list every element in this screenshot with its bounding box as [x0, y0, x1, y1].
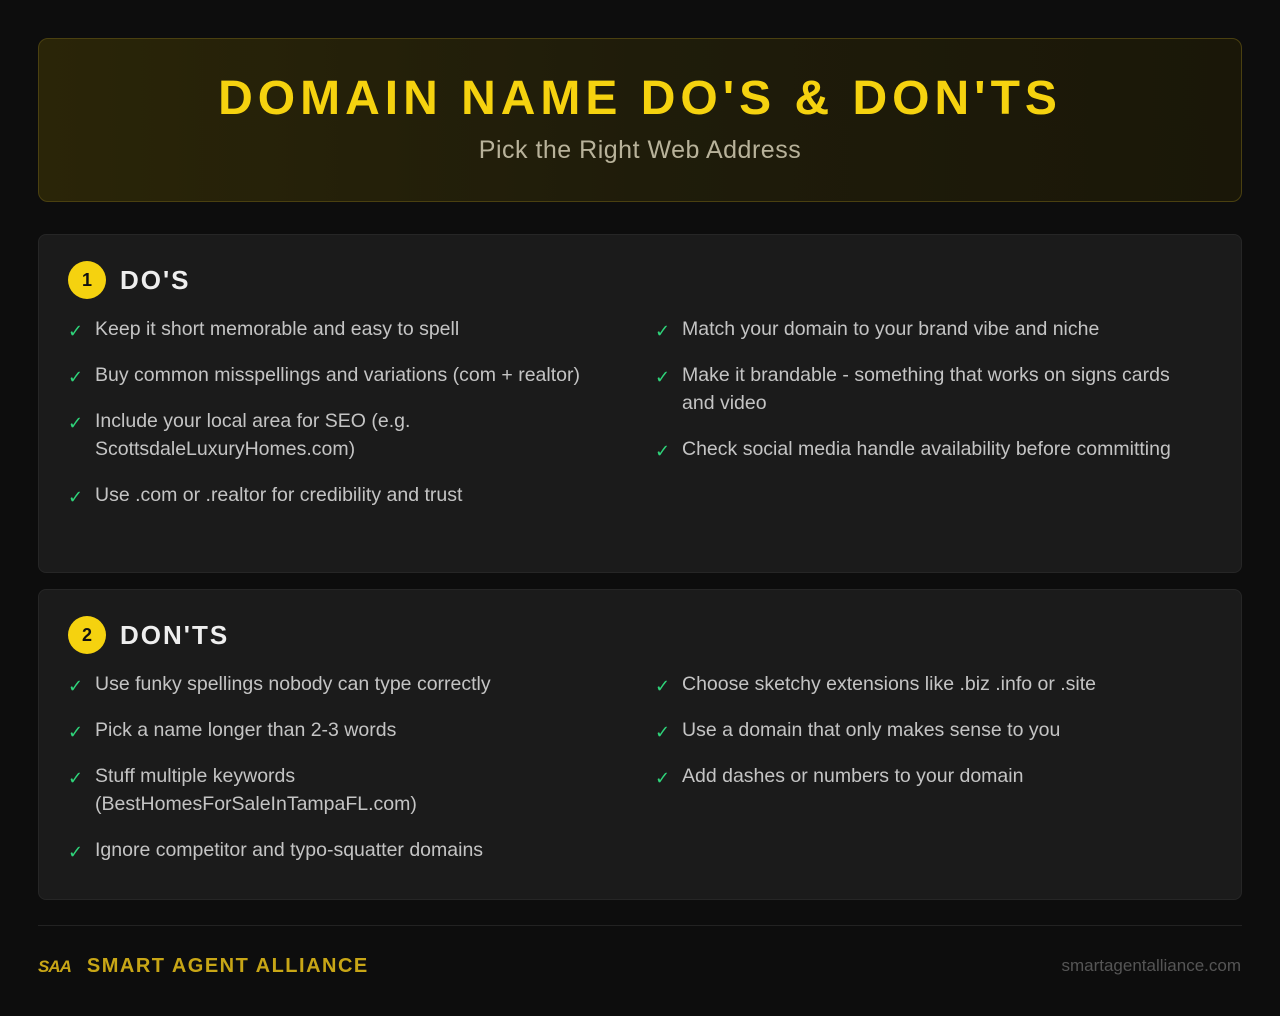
- heading: do's: 1: [82, 270, 92, 290]
- header: [38, 38, 1242, 202]
- don'ts right column: Use a domain that only makes sense to you: [682, 719, 1060, 741]
- panel: do's: [38, 234, 1242, 573]
- footer logo: SAA: [38, 956, 71, 976]
- do's right column: Match your domain to your brand vibe and niche: [682, 318, 1099, 340]
- do's left column: [70, 318, 580, 506]
- heading: don'ts: 2: [82, 624, 92, 644]
- don'ts right column: Add dashes or numbers to your domain: [682, 765, 1023, 787]
- footer url: smartagentalliance.com: [1061, 956, 1241, 975]
- do's right column: Make it brandable - something that works on signs cards and video: [682, 364, 1170, 414]
- heading: do's: [68, 261, 191, 299]
- footer logo: SMART AGENT ALLIANCE: [87, 955, 369, 977]
- subtitle: Pick the Right Web Address: [479, 136, 801, 164]
- do's right column: [658, 318, 1171, 460]
- don'ts left column: Use funky spellings nobody can type correctly: [95, 673, 491, 695]
- title: DOMAIN NAME DO'S & DON'TS: [218, 72, 1062, 125]
- heading: don'ts: [68, 616, 229, 654]
- don'ts right column: Choose sketchy extensions like .biz .info or .site: [682, 673, 1096, 695]
- don'ts right column: [658, 673, 1096, 787]
- do's left column: Keep it short memorable and easy to spell: [95, 318, 459, 340]
- don'ts left column: [70, 673, 491, 861]
- don'ts left column: Stuff multiple keywords (BestHomesForSaleInTampaFL.com): [95, 765, 417, 815]
- do's left column: Include your local area for SEO (e.g. ScottsdaleLuxuryHomes.com): [95, 410, 410, 460]
- don'ts left column: Pick a name longer than 2-3 words: [95, 719, 396, 741]
- heading: do's: DO'S: [120, 264, 191, 294]
- do's left column: Buy common misspellings and variations (com + realtor): [95, 364, 580, 386]
- panel: don'ts: [38, 589, 1242, 900]
- do's left column: Use .com or .realtor for credibility and trust: [95, 484, 462, 506]
- heading: don'ts: DON'TS: [120, 620, 229, 650]
- do's right column: Check social media handle availability before committing: [682, 438, 1171, 460]
- don'ts left column: Ignore competitor and typo-squatter domains: [95, 839, 483, 861]
